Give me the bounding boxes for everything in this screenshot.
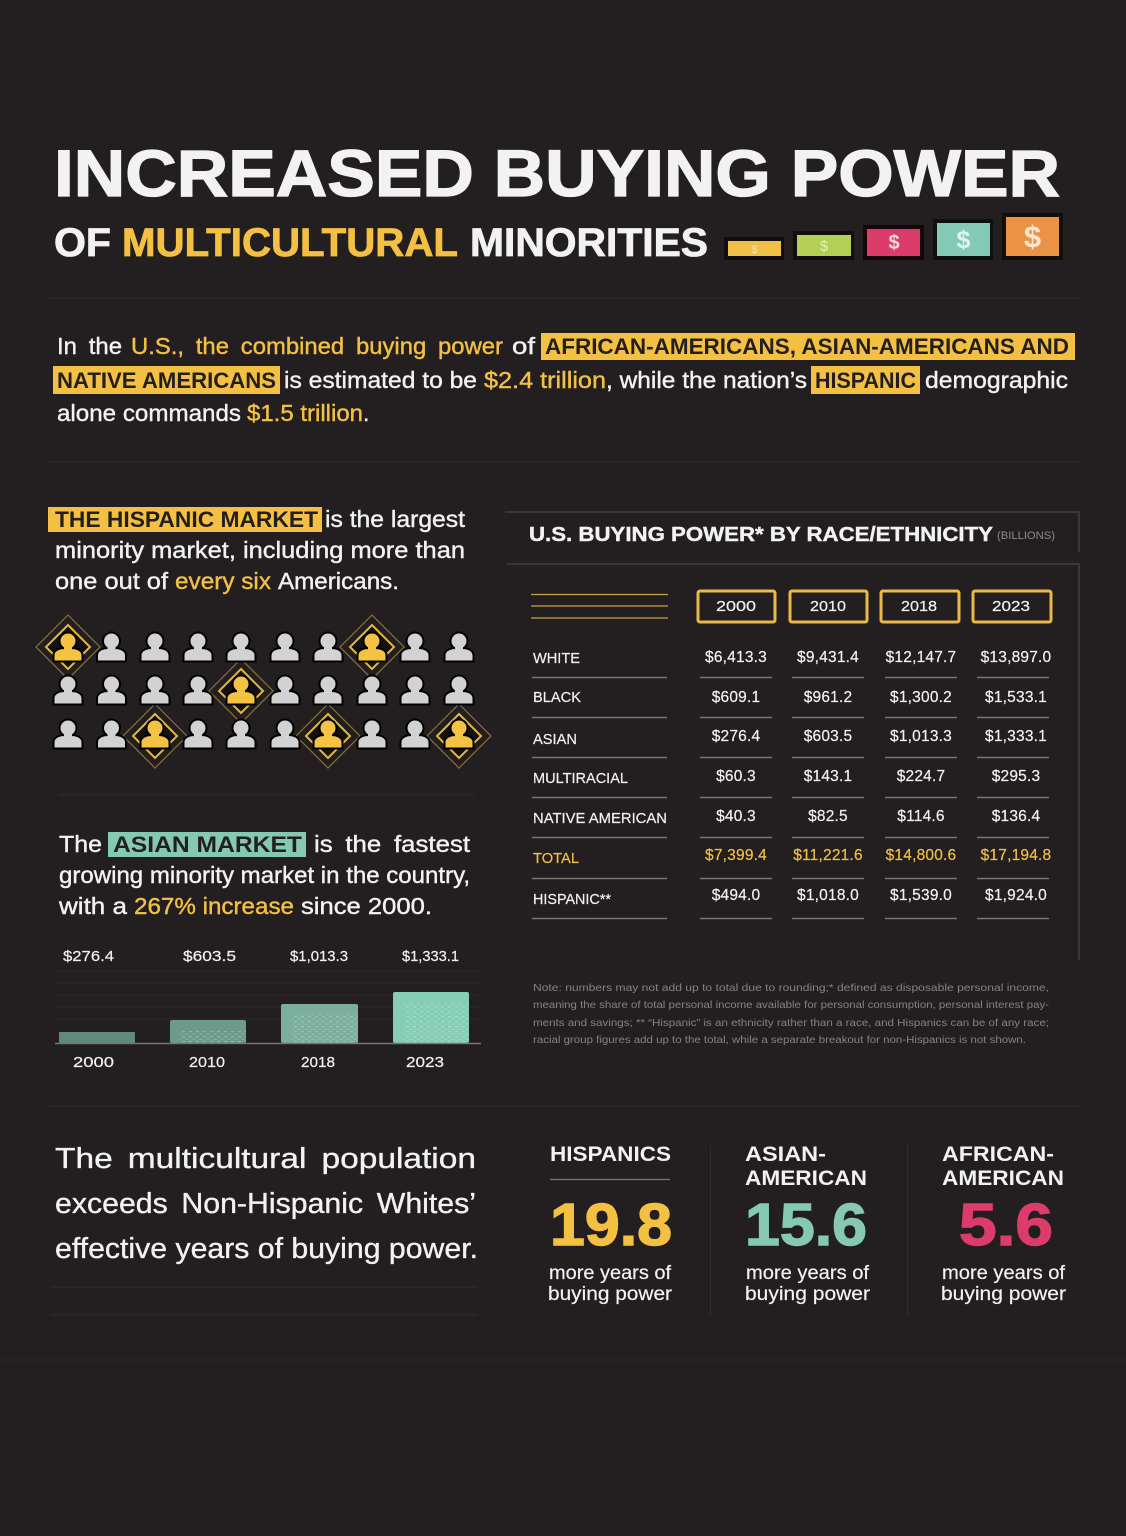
table rows: $11,221.6 bbox=[793, 847, 863, 864]
text block: Hispanic market: one out of bbox=[55, 568, 169, 594]
footnote: meaning the share of total personal income available for personal consumption, personal interest pay- bbox=[533, 999, 1050, 1011]
table rows: BLACK bbox=[533, 689, 581, 706]
intro paragraph: . bbox=[363, 400, 369, 426]
table rows: HISPANIC** bbox=[533, 891, 611, 908]
year headers bbox=[698, 591, 1051, 622]
table rows: $1,013.3 bbox=[890, 728, 952, 745]
table rows: $1,533.1 bbox=[985, 689, 1047, 706]
table rows: $494.0 bbox=[712, 887, 760, 904]
intro paragraph: AFRICAN-AMERICANS, ASIAN-AMERICANS AND bbox=[545, 334, 1069, 359]
table rows: $1,333.1 bbox=[985, 728, 1047, 745]
icon: growing dollar bills: $ bbox=[820, 238, 829, 255]
bar chart: Asian buying power: 2018 bbox=[301, 1054, 335, 1071]
table rows: $276.4 bbox=[712, 728, 760, 745]
table rows: $12,147.7 bbox=[886, 649, 956, 666]
table rows: TOTAL bbox=[533, 850, 579, 867]
bar chart: Asian buying power: 2010 bbox=[189, 1054, 225, 1071]
icon: growing dollar bills bbox=[724, 213, 1063, 260]
stat: Asian-American: more years of bbox=[746, 1263, 870, 1284]
stat: Hispanics: 19.8 bbox=[550, 1192, 672, 1258]
panel: table heading: (BILLIONS) bbox=[997, 530, 1055, 542]
bar chart: Asian buying power: $603.5 bbox=[183, 948, 236, 965]
table rows: $17,194.8 bbox=[981, 847, 1051, 864]
stat: Asian-American: ASIAN- bbox=[745, 1143, 826, 1166]
stat: Asian-American bbox=[745, 1143, 871, 1305]
bar chart: Asian buying power: 2000 bbox=[73, 1054, 114, 1071]
text block: Hispanic market: THE HISPANIC MARKET bbox=[55, 507, 319, 532]
intro paragraph: $2.4 trillion bbox=[484, 367, 606, 393]
table rows: $1,539.0 bbox=[890, 887, 952, 904]
stat: African-American: AFRICAN- bbox=[942, 1143, 1054, 1166]
text block: Hispanic market bbox=[48, 506, 466, 594]
intro paragraph: $1.5 trillion bbox=[247, 400, 363, 426]
table rows: $1,300.2 bbox=[890, 689, 952, 706]
title: MULTICULTURAL bbox=[122, 221, 458, 265]
intro paragraph: alone commands bbox=[57, 400, 241, 426]
icon: growing dollar bills: $ bbox=[888, 232, 900, 254]
icon: growing dollar bills: $ bbox=[1024, 219, 1041, 254]
bar chart: Asian buying power: $1,333.1 bbox=[402, 948, 459, 965]
table rows: $114.6 bbox=[897, 808, 945, 825]
table rows: $60.3 bbox=[716, 768, 756, 785]
intro paragraph: , while the nation’s bbox=[606, 367, 807, 393]
intro paragraph: is estimated to be bbox=[284, 367, 477, 393]
year headers: 2023 bbox=[992, 598, 1030, 615]
table rows: $961.2 bbox=[804, 689, 852, 706]
intro paragraph: U.S., the combined buying power bbox=[131, 333, 503, 359]
bar chart: Asian buying power: 2023 bbox=[406, 1054, 444, 1071]
stat: African-American: 5.6 bbox=[959, 1192, 1053, 1258]
table rows: NATIVE AMERICAN bbox=[533, 810, 667, 827]
intro paragraph: demographic bbox=[925, 367, 1068, 393]
table rows: $13,897.0 bbox=[981, 649, 1052, 666]
text block: Hispanic market: is the largest bbox=[325, 506, 466, 532]
stat: African-American: AMERICAN bbox=[942, 1167, 1064, 1190]
text block: Hispanic market: minority market, including more than bbox=[55, 537, 465, 563]
table rows: $603.5 bbox=[804, 728, 852, 745]
text block: Asian market: with a bbox=[58, 893, 127, 919]
table rows: $143.1 bbox=[804, 768, 852, 785]
table rows: $14,800.6 bbox=[886, 847, 956, 864]
stat: Asian-American: 15.6 bbox=[745, 1192, 867, 1258]
title: INCREASED BUYING POWER bbox=[54, 136, 1060, 210]
stat: African-American: buying power bbox=[941, 1284, 1067, 1305]
intro paragraph: NATIVE AMERICANS bbox=[57, 368, 276, 393]
bar chart: Asian buying power bbox=[55, 948, 481, 1071]
footnote bbox=[533, 982, 1050, 1046]
table rows bbox=[532, 649, 1052, 918]
stat: African-American: more years of bbox=[942, 1263, 1066, 1284]
stat: Hispanics: buying power bbox=[548, 1284, 673, 1305]
panel: table heading: U.S. BUYING POWER* BY RACE/ETHNICITY bbox=[529, 524, 994, 546]
table rows: $295.3 bbox=[992, 768, 1040, 785]
bar chart: Asian buying power: $1,013.3 bbox=[290, 948, 348, 965]
footnote: Note: numbers may not add up to total due to rounding;* defined as disposable personal income, bbox=[533, 982, 1049, 994]
pictogram: one in six Americans bbox=[36, 615, 491, 768]
text block: Asian market: since 2000. bbox=[301, 893, 432, 919]
year headers: 2018 bbox=[901, 598, 937, 615]
stat: Asian-American: buying power bbox=[745, 1284, 871, 1305]
table rows: $1,018.0 bbox=[797, 887, 859, 904]
table rows: WHITE bbox=[533, 650, 580, 667]
footnote: racial group figures add up to the total, while a separate breakout for non-Hispanics is not shown. bbox=[533, 1034, 1026, 1046]
table rows: MULTIRACIAL bbox=[533, 770, 628, 787]
title: OF bbox=[54, 221, 111, 265]
table rows: ASIAN bbox=[533, 731, 577, 748]
icon: growing dollar bills: $ bbox=[957, 226, 971, 254]
table rows: $40.3 bbox=[716, 808, 756, 825]
intro paragraph bbox=[53, 333, 1075, 426]
stat: Hispanics: more years of bbox=[549, 1263, 672, 1284]
year headers: 2010 bbox=[810, 598, 846, 615]
text block: Asian market: growing minority market in the country, bbox=[59, 862, 470, 888]
table rows: $9,431.4 bbox=[797, 649, 859, 666]
text block: Hispanic market: every six bbox=[175, 568, 272, 594]
icon: growing dollar bills: $ bbox=[751, 244, 758, 256]
year headers: 2000 bbox=[716, 598, 756, 615]
intro paragraph: In the bbox=[57, 333, 122, 359]
table rows: $609.1 bbox=[712, 689, 760, 706]
stat: Hispanics bbox=[548, 1143, 673, 1305]
intro paragraph: HISPANIC bbox=[815, 368, 916, 393]
text block: Asian market: is the fastest bbox=[314, 831, 471, 857]
stat: Hispanics: HISPANICS bbox=[550, 1143, 671, 1166]
panel: buying power table bbox=[507, 564, 1079, 960]
panel: table heading bbox=[505, 512, 1079, 552]
table rows: $6,413.3 bbox=[705, 649, 767, 666]
text block: Asian market bbox=[58, 831, 471, 919]
text block: Hispanic market: Americans. bbox=[278, 568, 399, 594]
text block: years of buying power: The multicultural population bbox=[55, 1143, 476, 1175]
text block: Asian market: ASIAN MARKET bbox=[113, 832, 303, 857]
table rows: $224.7 bbox=[897, 768, 945, 785]
text block: Asian market: 267% increase bbox=[134, 893, 294, 919]
bar chart: Asian buying power: $276.4 bbox=[63, 948, 114, 965]
stat: Asian-American: AMERICAN bbox=[745, 1167, 867, 1190]
text block: years of buying power: effective years of buying power. bbox=[55, 1233, 478, 1265]
title bbox=[54, 136, 1060, 265]
text block: Asian market: The bbox=[59, 831, 102, 857]
footnote: ments and savings; ** “Hispanic” is an ethnicity rather than a race, and Hispanics can be of any race; bbox=[533, 1017, 1049, 1029]
text block: years of buying power bbox=[55, 1143, 478, 1265]
table rows: $82.5 bbox=[808, 808, 848, 825]
text block: years of buying power: exceeds Non-Hispanic Whites’ bbox=[55, 1188, 476, 1220]
stat: African-American bbox=[941, 1143, 1067, 1305]
table rows: $1,924.0 bbox=[985, 887, 1047, 904]
title: MINORITIES bbox=[470, 221, 708, 265]
intro paragraph: of bbox=[512, 333, 536, 359]
table rows: $136.4 bbox=[992, 808, 1040, 825]
table rows: $7,399.4 bbox=[705, 847, 767, 864]
